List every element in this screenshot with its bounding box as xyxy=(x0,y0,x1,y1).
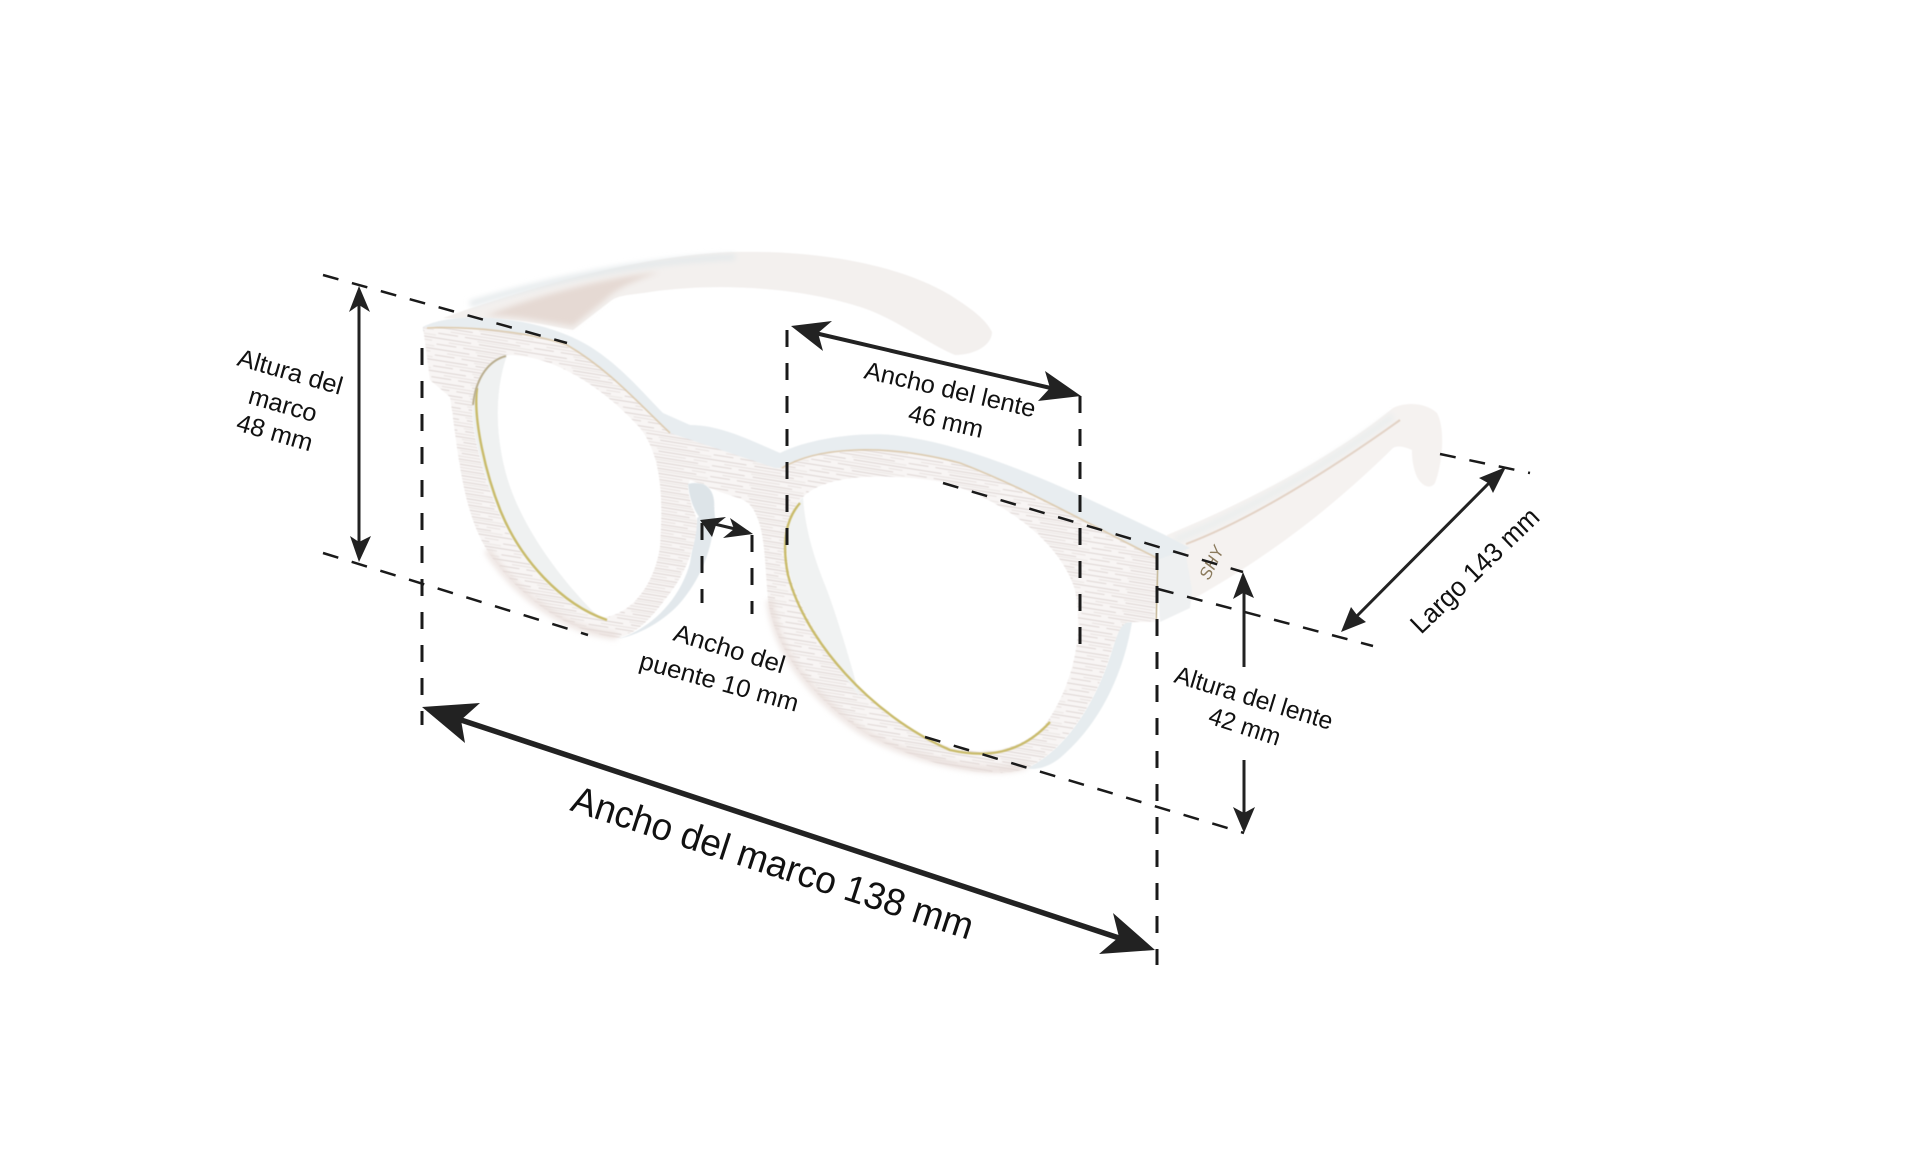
arrow: frame width xyxy=(422,703,1155,954)
logo on temple: SHY xyxy=(1196,542,1229,583)
label: bridge width: puente 10 mm xyxy=(636,647,802,718)
label: bridge width: Ancho del xyxy=(670,619,788,679)
frame right edge shine xyxy=(1027,622,1132,769)
arrow: temple length xyxy=(1341,467,1506,632)
right lens inner rim xyxy=(785,497,1050,754)
label: frame height: marco xyxy=(245,382,320,428)
label: lens height: 42 mm xyxy=(1205,702,1284,752)
arrow: bridge width xyxy=(700,517,753,538)
arrow: frame height xyxy=(349,286,371,562)
label: frame height xyxy=(233,344,346,457)
label: bridge width xyxy=(636,619,802,718)
label: lens height: Altura del lente xyxy=(1171,661,1336,736)
frame top edge line xyxy=(427,328,1157,558)
right temple arm xyxy=(1160,404,1442,617)
dashed guide lines xyxy=(323,275,1530,965)
label: temple length: Largo 143 mm xyxy=(1404,502,1545,639)
arrow: lens width xyxy=(791,321,1081,401)
nose pad xyxy=(688,483,716,525)
label: lens width: 46 mm xyxy=(906,400,986,444)
arrow: lens height upper part xyxy=(1233,572,1254,667)
frame bottom edge tint xyxy=(487,550,1027,770)
glasses illustration xyxy=(423,252,1442,773)
left lens inner rim xyxy=(473,355,607,620)
arrow: lens height lower part xyxy=(1233,760,1255,833)
left temple arm xyxy=(443,252,992,355)
label: lens width: Ancho del lente xyxy=(862,357,1038,423)
hinge block xyxy=(1157,550,1192,622)
label: frame height: 48 mm xyxy=(233,409,316,457)
label: frame height: Altura del xyxy=(234,344,346,401)
label: frame width: Ancho del marco 138 mm xyxy=(566,779,979,948)
front wood frame xyxy=(423,327,1157,773)
frame left lens outer shadow xyxy=(617,507,714,639)
frame rim shine, top edge xyxy=(423,318,1190,562)
